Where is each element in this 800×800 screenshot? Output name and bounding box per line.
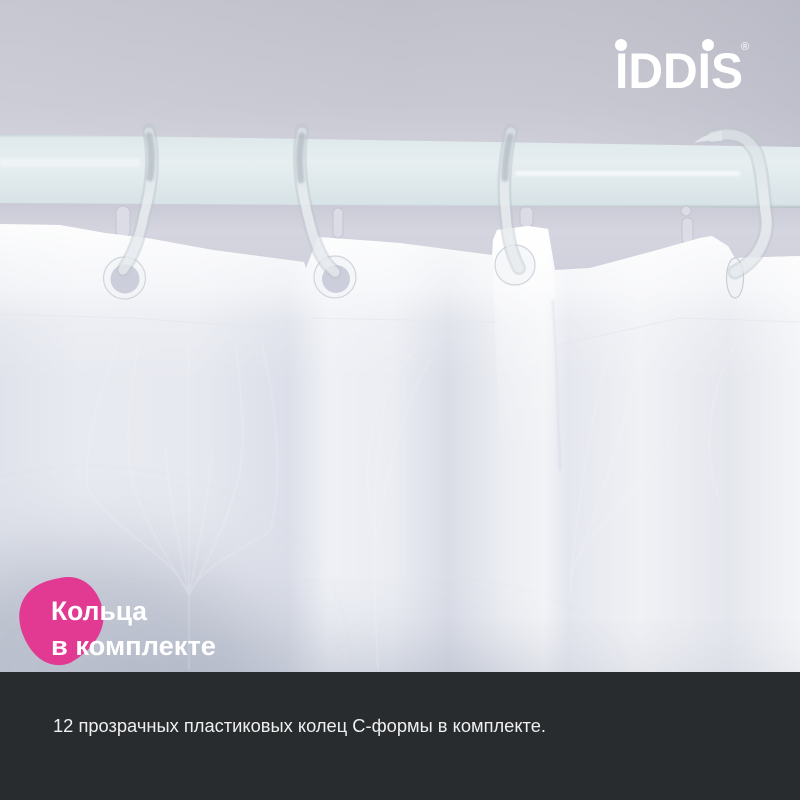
logo: ®: [741, 41, 749, 53]
shower rod: [0, 134, 800, 208]
ring 4: [694, 131, 767, 298]
footer text: 12 прозрачных пластиковых колец С-формы в комплекте.: [53, 716, 546, 736]
curtain: [0, 224, 800, 672]
curtain hem seam: [318, 318, 800, 334]
footer bar: [0, 672, 800, 800]
ring 2: [300, 130, 356, 298]
band behind the curtain: [0, 200, 800, 290]
wall background: [0, 0, 800, 150]
small hooks behind the curtain: [116, 206, 693, 244]
ring 1: [104, 130, 152, 299]
heading: [51, 596, 216, 661]
front fold panel: [530, 226, 531, 227]
heading: Кольца: [51, 596, 148, 626]
feather pattern: [173, 569, 200, 670]
heading: в комплекте: [51, 631, 216, 661]
ring 3: [495, 130, 535, 285]
logo: IDDIS: [615, 43, 743, 99]
pink blob: [19, 577, 104, 665]
